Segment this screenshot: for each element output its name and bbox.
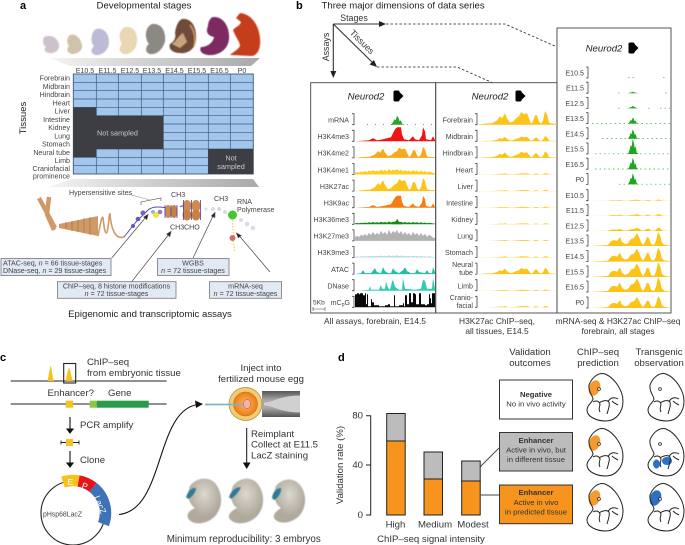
coiled fibre	[59, 216, 98, 236]
tissue labels: Forebrain	[443, 116, 473, 124]
scale bar: 5Kb	[313, 300, 325, 306]
embryo: prediction, different tissue	[587, 429, 623, 476]
plasmid	[41, 477, 108, 545]
tissue row labels	[33, 74, 71, 180]
outcome box: negative	[500, 380, 572, 419]
embryo: observation, negative	[648, 374, 684, 421]
reimplant label: LacZ staining	[251, 450, 308, 461]
panel letter b: b	[296, 0, 303, 12]
tissue labels: Hindbrain	[443, 150, 473, 158]
embryo: observation, predicted tissue	[648, 484, 684, 531]
assay labels: H3K27ac	[320, 183, 349, 191]
tissue labels: tube	[459, 269, 473, 277]
H3K27me3 track	[355, 230, 435, 241]
stage column labels: E11.5	[98, 67, 117, 75]
stage column labels: E15.5	[188, 67, 206, 75]
assay labels: ATAC	[331, 266, 349, 274]
mRNA stage tracks	[592, 78, 670, 184]
assay labels: H3K4me1	[317, 166, 349, 174]
enhancer label: Enhancer?	[48, 388, 94, 399]
panel captions: all tissues, E14.5	[465, 326, 529, 336]
mRNA track	[367, 116, 435, 125]
embryo: prediction, predicted tissue	[587, 484, 623, 531]
assay labels: G	[344, 299, 350, 307]
stage labels: P0	[575, 299, 584, 307]
stage labels: E16.5	[565, 161, 584, 169]
panel captions	[324, 316, 681, 336]
tissue labels: Neural	[452, 261, 473, 269]
H3K27ac tissue tracks	[477, 111, 557, 307]
callout: WGBS: WGBS	[182, 260, 204, 268]
outcome box: enhancer in predicted tissue	[500, 485, 572, 524]
tissue labels: Limb	[458, 282, 473, 290]
plasmid: LacZ	[92, 494, 108, 515]
callout: mRNA-seq: mRNA-seq	[228, 282, 263, 290]
chemical group labels: CH3	[171, 191, 185, 199]
callout: ChIP-seq: n = 72 tissue-stages	[85, 290, 149, 298]
sampling matrix	[73, 74, 253, 174]
not sampled label, early: Not sampled	[97, 128, 138, 138]
callout: mRNA-seq: n = 72 tissue-stages	[214, 290, 278, 298]
H3K9me3 track	[355, 255, 435, 258]
gene icon	[628, 42, 638, 54]
tissue labels	[443, 116, 474, 310]
column headers: observation	[634, 358, 684, 369]
bar labels: Medium	[418, 520, 452, 530]
injection label: fertilized mouse egg	[218, 374, 304, 385]
panel letter d: d	[338, 352, 345, 364]
bar chart	[335, 410, 489, 545]
axis label: assays: Assays	[321, 32, 331, 61]
stage column labels	[76, 67, 246, 75]
open chromatin with bound factors	[124, 205, 188, 237]
callout: ChIP-seq: ChIP–seq, 8 histone modifications	[63, 282, 171, 290]
callout: ATAC and DNase: DNase-seq, n = 29 tissue-stages	[3, 267, 107, 275]
stage labels: P0	[575, 176, 584, 184]
ChIP-seq peaks	[11, 364, 167, 383]
H3K27ac stage tracks	[590, 200, 670, 308]
reimplant label: Reimplant	[251, 429, 294, 440]
stage column labels: E14.5	[165, 67, 184, 75]
chromatin diagram: RNA	[237, 198, 252, 206]
panel a: developmental stages and assays	[1, 0, 282, 320]
curved arrow to injection	[119, 400, 203, 514]
stage labels: E12.5	[565, 222, 584, 230]
gene title: Neurod2	[472, 92, 509, 102]
embryo photographs	[43, 13, 260, 56]
outcome box: enhancer in different tissue: Enhancer	[518, 436, 554, 445]
H3K27ac track	[355, 178, 435, 191]
bar labels: High	[386, 520, 405, 530]
chromatin diagram: CH3	[170, 224, 184, 232]
chromatin diagram	[39, 189, 275, 252]
tissue row labels: Craniofacial	[33, 165, 70, 173]
callout: mRNA-seq	[210, 282, 282, 298]
column headers: prediction	[577, 358, 619, 369]
DNase track	[355, 278, 435, 291]
stained embryo photographs	[186, 479, 305, 523]
chromatin diagram: CH3	[214, 195, 228, 203]
assay labels: H3K27me3	[314, 232, 349, 240]
tissue row labels: Lung	[54, 132, 70, 140]
outcome box: enhancer in predicted tissue: Active in vivo	[514, 498, 558, 507]
heading: developmental stages: Developmental stages	[97, 0, 192, 12]
panel captions: mRNA-seq & H3K27ac ChIP–seq	[556, 316, 681, 326]
stage column labels: P0	[238, 67, 246, 75]
y axis	[366, 416, 371, 515]
axis label: tissues: Tissues	[18, 101, 29, 134]
x axis title: ChIP–seq signal intensity	[377, 534, 485, 545]
tissue labels: Lung	[457, 232, 473, 240]
stage labels: E13.5	[565, 238, 584, 246]
RNA polymerase	[228, 210, 237, 220]
outcome box: enhancer in different tissue	[500, 432, 572, 471]
stage labels: E14.5	[565, 253, 584, 261]
connector lines	[480, 448, 500, 495]
stage labels: E10.5	[565, 192, 584, 200]
bar: high	[387, 414, 405, 515]
axis label: tissues: Tissues	[348, 28, 377, 57]
callout: ATAC and DNase: ATAC-seq, n = 66 tissue-stages	[3, 260, 103, 268]
y tick labels: 80	[352, 410, 363, 422]
stage labels: E13.5	[565, 115, 584, 123]
shelf above chromatin	[48, 179, 259, 187]
arrow: PCR	[67, 417, 73, 433]
tissue row labels: Neural tube	[33, 149, 70, 157]
scale bar	[313, 300, 325, 311]
tissue row labels: Heart	[53, 100, 70, 108]
H3K36me3 track	[355, 219, 435, 224]
callout: WGBS: n = 72 tissue-stages	[161, 267, 225, 275]
stage labels: E16.5	[565, 284, 584, 292]
assays track panel	[313, 90, 435, 311]
axis label: stages: Stages	[340, 13, 368, 23]
column headers: outcomes	[509, 358, 551, 369]
outcome box: enhancer in predicted tissue: Enhancer	[518, 488, 554, 497]
track panel frames	[311, 28, 671, 313]
not sampled block, early stages	[73, 108, 163, 157]
tissues track panel	[443, 90, 557, 310]
stage labels: E11.5	[566, 84, 584, 92]
tissue labels: Midbrain	[446, 133, 473, 141]
y tick labels: 0	[358, 510, 363, 521]
plasmid: P	[80, 480, 90, 492]
stage labels: E14.5	[565, 130, 584, 138]
panel d: validation rates	[335, 347, 684, 545]
panel captions: All assays, forebrain, E14.5	[324, 316, 426, 326]
H3K4me3 track	[355, 127, 435, 141]
column headers: ChIP–seq	[577, 347, 619, 358]
embryo: observation, different tissue	[648, 429, 684, 476]
stage labels: E11.5	[566, 207, 584, 215]
stage labels: E10.5	[565, 70, 584, 78]
gene icon	[394, 90, 404, 102]
axes diagram	[321, 13, 557, 82]
stage column labels: E12.5	[121, 67, 139, 75]
column headers: Transgenic	[635, 347, 683, 358]
tissue labels: Stomach	[445, 249, 473, 257]
H3K4me2 track	[355, 147, 435, 158]
bar: modest	[462, 461, 480, 515]
gene locus	[11, 401, 167, 408]
not sampled label, late: Not	[225, 154, 237, 162]
brackets	[475, 114, 477, 307]
tissue row labels: Liver	[55, 108, 71, 116]
tissue row labels: Intestine	[43, 116, 70, 124]
panel captions: forebrain, all stages	[581, 326, 655, 336]
heading: three dimensions: Three major dimensions of data series	[322, 0, 485, 12]
tissue row labels: Forebrain	[40, 74, 70, 82]
stage labels	[565, 70, 584, 307]
bar labels: Modest	[457, 520, 489, 530]
ChIP-seq label: from embryonic tissue	[87, 368, 181, 379]
assay labels: H3K9me3	[317, 249, 349, 257]
ChIP-seq label: ChIP–seq	[87, 357, 129, 368]
outcome box: enhancer in different tissue: in different tissue	[507, 455, 565, 464]
callout: ATAC and DNase	[1, 258, 111, 276]
stage labels: E15.5	[565, 146, 584, 154]
outcome box: negative: Negative	[520, 390, 553, 399]
tissue row labels: prominence	[33, 172, 70, 180]
panel letter c: c	[0, 352, 6, 364]
gene label: Gene	[108, 388, 131, 399]
assay labels: H3K36me3	[314, 216, 349, 224]
panel c: transgenic validation workflow	[0, 352, 321, 545]
tissue row labels: Kidney	[48, 124, 70, 132]
gene icon	[516, 90, 526, 102]
tissue labels: Liver	[458, 183, 474, 191]
gene title: Neurod2	[586, 44, 623, 54]
H3K4me1 track	[355, 169, 435, 174]
panel captions: H3K27ac ChIP–seq,	[459, 316, 535, 326]
stage labels: E15.5	[565, 268, 584, 276]
stage column labels: E16.5	[210, 67, 229, 75]
arrow: reimplant	[244, 428, 250, 468]
assay labels: mC	[331, 299, 342, 307]
column headers: Validation	[509, 347, 551, 358]
tissue row labels: Hindbrain	[40, 91, 70, 99]
plasmid: pHsp68LacZ	[43, 512, 82, 518]
chromatin diagram: Hypersensitive sites	[69, 189, 133, 197]
assay labels: H3K4me3	[317, 133, 349, 141]
assay labels	[314, 116, 350, 308]
plasmid: E	[68, 477, 74, 487]
injection label: Inject into	[240, 363, 282, 374]
tissue labels: Kidney	[451, 216, 473, 224]
amplified fragment	[61, 439, 79, 446]
chromatin diagram: CHO	[184, 224, 200, 232]
tissue row labels: Limb	[55, 157, 70, 165]
y tick labels	[352, 410, 363, 521]
callout: WGBS	[158, 258, 229, 276]
clone label: Clone	[80, 455, 105, 466]
mRNA strand and ribosome	[232, 220, 235, 252]
assay labels: mRNA	[328, 116, 349, 124]
arrow: clone	[67, 451, 73, 467]
injection diagram	[205, 388, 300, 420]
mCpG track	[355, 293, 435, 307]
assay labels: DNase	[327, 282, 349, 290]
brackets	[352, 114, 354, 307]
panel letter a: a	[20, 0, 27, 12]
outcome box: enhancer in different tissue: Active in vivo, but	[506, 446, 567, 454]
tissue row labels: Midbrain	[43, 83, 70, 91]
column headers	[509, 347, 684, 369]
brackets	[586, 67, 588, 308]
assay labels: H3K9ac	[324, 200, 349, 208]
H3K9ac track	[355, 196, 435, 208]
nucleosomes	[164, 205, 172, 218]
stage column labels: E13.5	[143, 67, 161, 75]
panel b: data series	[296, 0, 681, 336]
tissue row labels: Stomach	[42, 140, 70, 148]
tissue labels: Heart	[456, 166, 473, 174]
tissue labels: facial	[456, 302, 473, 310]
chromatin diagram: Polymerase	[237, 206, 275, 214]
shelf under embryos	[50, 58, 260, 66]
embryo: prediction, negative	[587, 374, 623, 421]
not sampled label, late: sampled	[217, 162, 245, 171]
reproducibility caption: Minimum reproducibility: 3 embryos	[167, 534, 321, 545]
chromosome	[39, 197, 55, 230]
stage column labels: E10.5	[76, 67, 94, 75]
stage labels: E12.5	[565, 100, 584, 108]
y axis title: Validation rate (%)	[335, 426, 346, 504]
reimplant label: Collect at E11.5	[251, 440, 318, 451]
assay labels: p	[342, 302, 345, 308]
not sampled block, late stages	[208, 149, 253, 174]
outcome box: negative: No in vivo activity	[506, 400, 566, 408]
PCR label: PCR amplify	[80, 420, 134, 431]
gene title: Neurod2	[348, 92, 385, 102]
outcome box: enhancer in predicted tissue: in predicted tissue	[505, 508, 567, 516]
faded fibre beads	[204, 207, 255, 230]
callout arrows	[112, 212, 270, 282]
bar: medium	[424, 452, 442, 515]
tissue labels: Cranio-	[450, 294, 474, 302]
y tick labels: 40	[352, 460, 363, 471]
assay labels: H3K4me2	[317, 150, 349, 158]
hypersensitive bracket	[141, 198, 161, 205]
stages track panel	[565, 42, 670, 308]
bar labels	[386, 520, 489, 530]
tissue labels: Intestine	[446, 200, 473, 208]
callout: ChIP-seq	[58, 282, 176, 298]
ATAC track	[355, 267, 435, 274]
heading: assays: Epigenomic and transcriptomic assays	[68, 309, 232, 320]
